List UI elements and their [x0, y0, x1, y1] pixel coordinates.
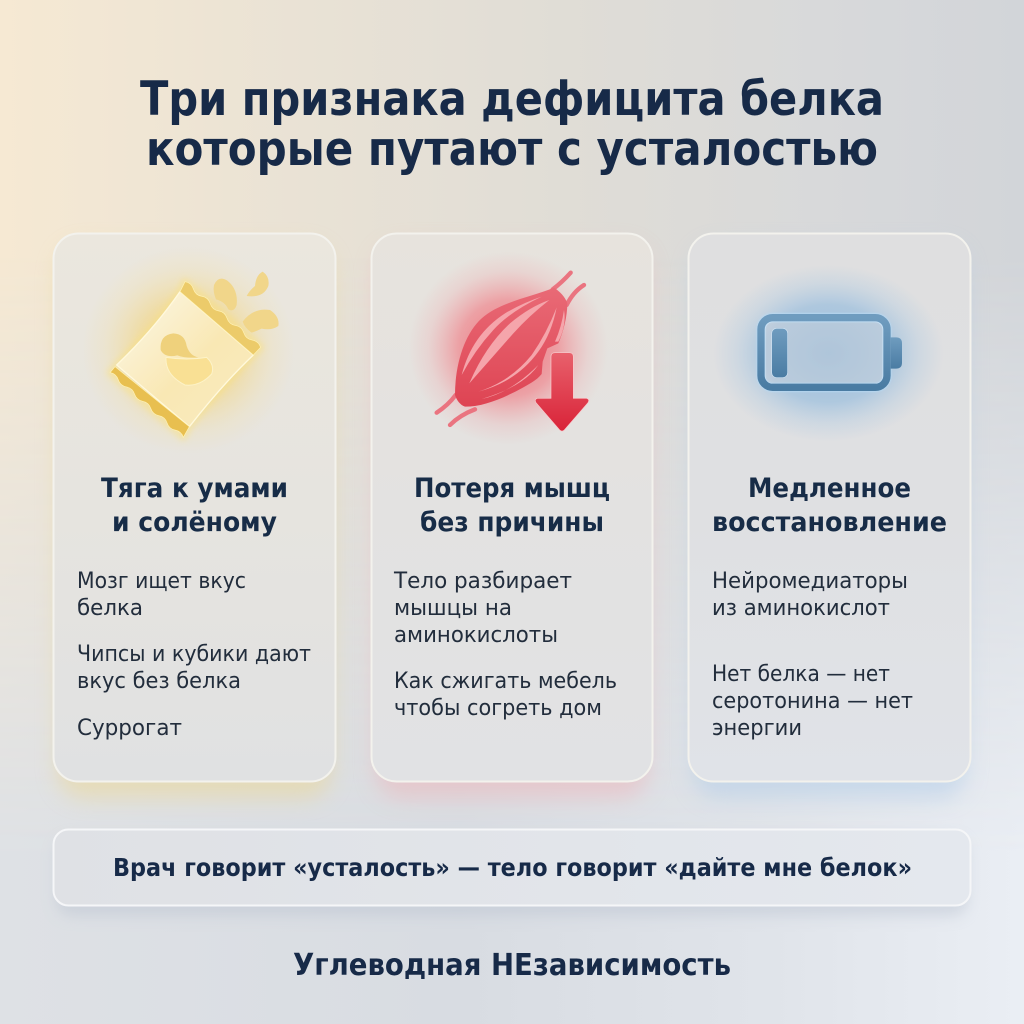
text block: энергии	[712, 716, 802, 741]
heading: и солёному	[112, 507, 277, 538]
callout banner: Врач говорит «усталость» — тело говорит «дайте мне белок»	[113, 853, 912, 882]
text block: белка	[77, 596, 143, 621]
text block	[712, 569, 913, 741]
text block: Чипсы и кубики дают	[77, 642, 311, 667]
callout banner	[54, 830, 970, 916]
text block: Как сжигать мебель	[394, 669, 617, 694]
icon: chips bag	[82, 247, 295, 453]
text block: Суррогат	[77, 716, 182, 741]
chip 1	[214, 279, 237, 310]
text block: чтобы согреть дом	[394, 696, 602, 721]
heading: Тяга к умами	[101, 473, 288, 504]
text block: мышцы на	[394, 596, 512, 621]
chip 2	[247, 272, 269, 296]
heading	[101, 473, 288, 538]
icon: muscle with down arrow	[408, 252, 608, 445]
panel: slow recovery	[688, 234, 970, 798]
title	[140, 72, 884, 177]
heading	[414, 473, 610, 538]
text block: Тело разбирает	[393, 569, 572, 594]
text block: Мозг ищет вкус	[77, 569, 246, 594]
text block: Нет белка — нет	[712, 662, 890, 687]
panel: craving	[54, 234, 336, 798]
text block	[393, 569, 617, 721]
icon: low battery	[713, 265, 943, 442]
chip on bag, bottom	[166, 357, 213, 385]
heading: Медленное	[748, 473, 911, 504]
chip on bag, top	[161, 333, 198, 358]
text block: вкус без белка	[77, 669, 241, 694]
text block	[77, 569, 311, 741]
text block: серотонина — нет	[712, 689, 913, 714]
text block: аминокислоты	[394, 623, 558, 648]
panel: muscle loss	[372, 234, 652, 798]
chip 3	[243, 310, 279, 333]
heading: восстановление	[712, 507, 947, 538]
title: Три признака дефицита белка	[140, 72, 884, 127]
heading: без причины	[420, 507, 604, 538]
title: которые путают с усталостью	[146, 122, 878, 177]
heading	[712, 473, 947, 538]
text block: Нейромедиаторы	[712, 569, 908, 594]
heading: Потеря мышц	[414, 473, 610, 504]
footer brand: Углеводная НЕзависимость	[293, 948, 731, 983]
text block: из аминокислот	[712, 596, 890, 621]
